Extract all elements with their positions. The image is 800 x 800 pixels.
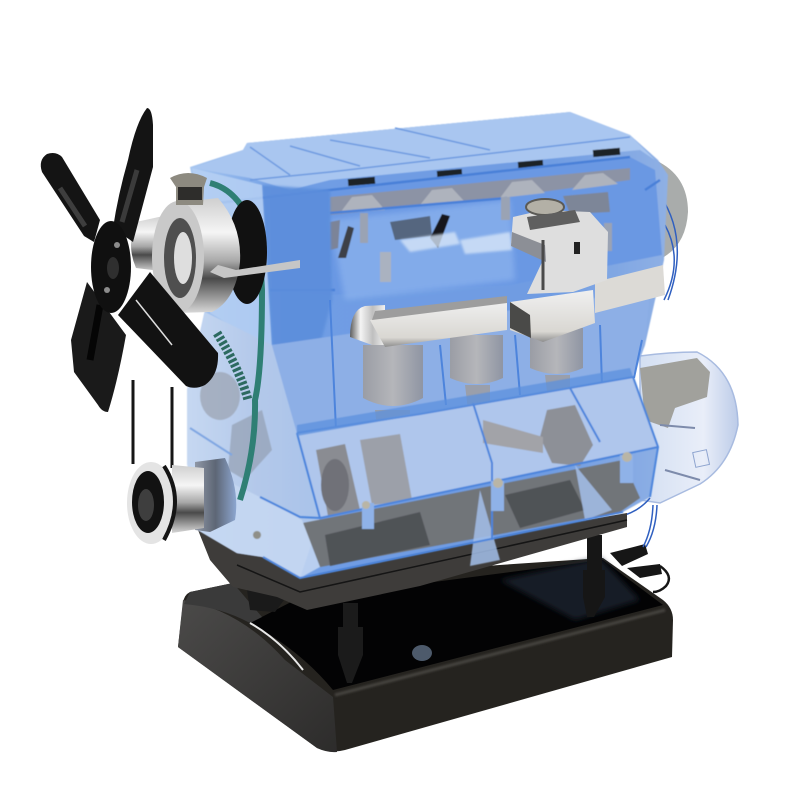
top left lighter block: [192, 168, 272, 350]
vertical blue ribs: [330, 300, 642, 430]
grey rocker strip: [330, 168, 630, 215]
power cords and plugs: [610, 544, 669, 592]
rear housing dome: [640, 352, 738, 503]
rear cylinder cap: [655, 160, 688, 258]
white-blue glints: [400, 232, 512, 254]
crank web centre: [360, 434, 412, 505]
display base: [178, 558, 673, 752]
base top reflection: [500, 558, 640, 620]
fan blade bottom: [71, 282, 126, 412]
tray seam: [237, 520, 627, 592]
grey disc on left face: [200, 372, 240, 420]
blue wires: [625, 195, 677, 547]
chrome upper pulley: [131, 173, 300, 313]
right bar: [595, 265, 665, 313]
glass overlay lower: [470, 465, 612, 566]
valve band light patch: [330, 200, 515, 300]
drum front flange: [152, 201, 204, 313]
post front: [338, 603, 363, 683]
dome wiring: [660, 425, 700, 480]
mid strip between pistons and crankcase: [272, 290, 650, 433]
screws: [253, 452, 633, 539]
translucent collar: [195, 458, 236, 532]
cams and springs: [330, 192, 612, 282]
base top face: [250, 560, 663, 690]
base front rim highlight: [335, 610, 665, 695]
right blade slot: [136, 300, 172, 345]
grey rocker facets: [340, 173, 618, 213]
block silhouette: [187, 112, 668, 578]
carburettor: [511, 210, 608, 294]
pulley bore inner: [138, 489, 154, 521]
lid top: [192, 112, 655, 190]
dome moulding mark: [693, 450, 710, 467]
crank pin: [321, 459, 349, 511]
pulley flange: [127, 462, 175, 544]
manifold left bar: [370, 300, 507, 347]
idler rod: [210, 260, 300, 278]
lower crank pulley: [127, 458, 236, 544]
large drum: [175, 198, 240, 313]
black pulley ring behind chrome: [227, 200, 267, 304]
carburettor slot: [574, 242, 580, 254]
lower interior: [303, 460, 640, 567]
support posts: [247, 535, 605, 683]
top cap: [170, 173, 207, 205]
grey strut on left face: [228, 410, 272, 480]
motor inside dome: [640, 358, 710, 428]
carburettor edge: [542, 240, 544, 290]
top cap shading: [178, 187, 202, 200]
piston rods: [375, 375, 570, 435]
saturated front left panel: [262, 185, 332, 345]
base white highlight: [250, 623, 303, 670]
valve band: [270, 157, 662, 295]
lower left panel: [187, 312, 320, 578]
pistons: [363, 328, 583, 435]
chrome cylinder: [172, 465, 204, 533]
manifold top edge: [372, 296, 507, 320]
black engine tray: [198, 513, 627, 610]
post right: [583, 535, 605, 617]
bottom blade slot: [90, 305, 100, 360]
crankcase panel: [190, 368, 658, 578]
connecting rod: [540, 405, 593, 466]
pulley bore: [132, 471, 164, 533]
left blade slot: [60, 188, 85, 226]
front bottom skirt: [190, 463, 320, 578]
post hidden left: [247, 590, 287, 612]
base silhouette, right face: [178, 558, 673, 752]
manifold elbow: [350, 305, 385, 345]
blue ridge lines: [200, 157, 660, 290]
left diagonal rib: [190, 428, 232, 455]
dark rockers: [348, 148, 620, 186]
carburettor ring: [526, 199, 564, 215]
pulley groove: [164, 466, 175, 540]
crank bar: [483, 420, 543, 453]
fan: [41, 108, 218, 412]
upper strip of crankcase: [297, 368, 633, 436]
base left face: [178, 600, 337, 752]
chrome manifold and carburettor: [350, 199, 665, 347]
fan belt: [133, 380, 172, 468]
fan blade left: [41, 153, 100, 242]
plug two: [627, 564, 662, 578]
hub centre: [107, 257, 119, 279]
fan blade top: [113, 108, 153, 242]
fan blade right: [118, 272, 218, 388]
base left rim: [184, 583, 262, 623]
top blade slot: [122, 170, 137, 222]
fan hub: [91, 221, 131, 313]
interior glass strips: [325, 480, 585, 566]
lid grooves: [250, 128, 630, 180]
crankcase cover: [297, 377, 658, 518]
button on base: [412, 645, 432, 661]
engine block: [187, 112, 668, 578]
drum flange inner: [164, 218, 196, 298]
junction shadow: [510, 302, 531, 338]
crankcase outlines: [260, 377, 658, 578]
drum flange glint: [174, 232, 192, 284]
small front drum: [131, 215, 168, 272]
plug one: [610, 544, 648, 566]
cord loop: [653, 566, 669, 592]
manifold junction: [510, 290, 595, 342]
carburettor side: [511, 232, 546, 262]
hub bolts: [114, 242, 120, 248]
crank web left: [316, 444, 360, 516]
carburettor neck: [527, 210, 580, 230]
timing belt and green gasket: [210, 183, 262, 500]
